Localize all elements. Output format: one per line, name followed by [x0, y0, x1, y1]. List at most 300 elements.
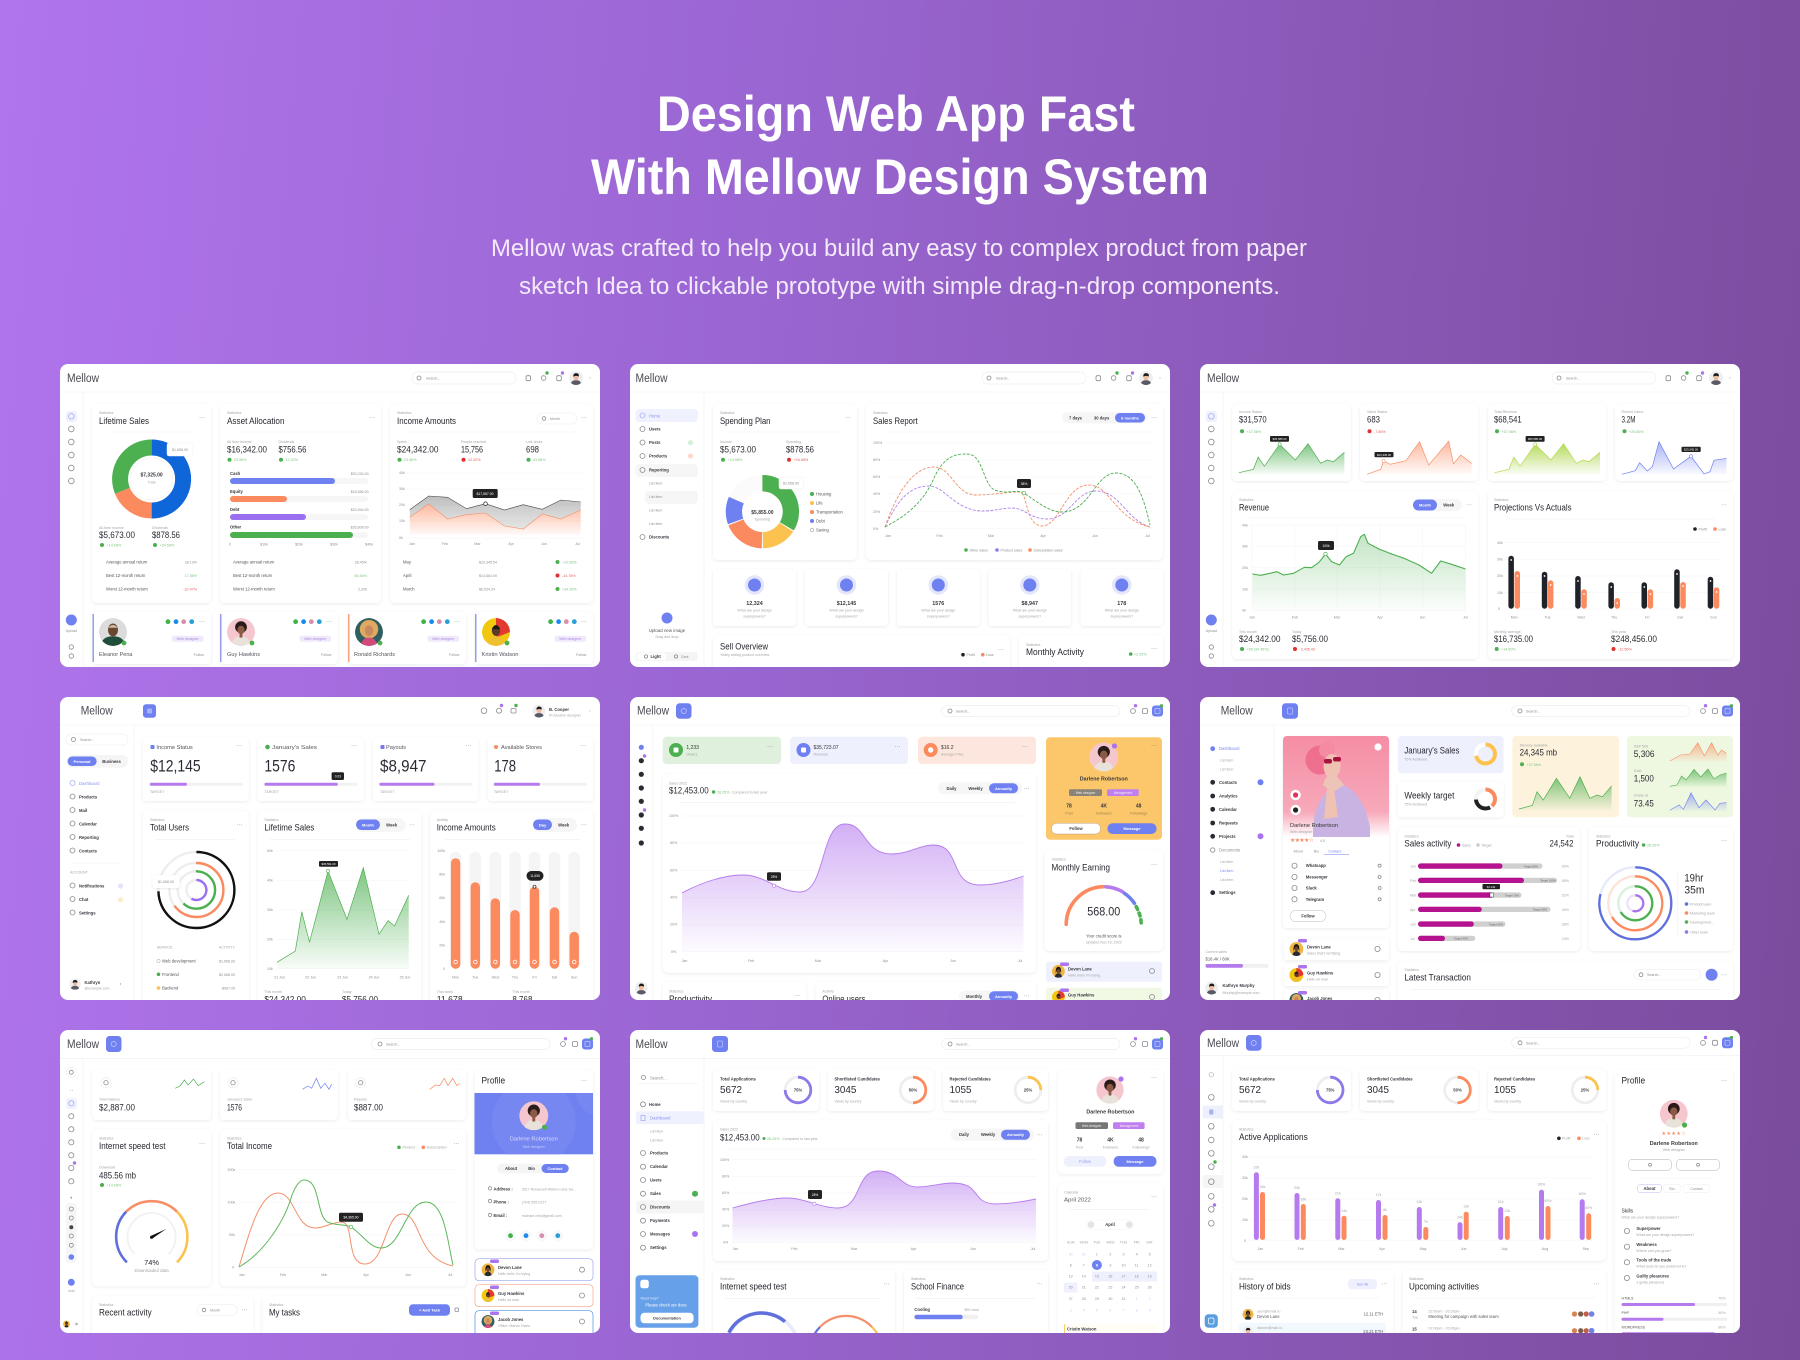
- card: lifetime sales area chart: Week: [386, 822, 398, 828]
- card: spending plan: Housing: [816, 492, 832, 496]
- card: active applications bar chart: Loss: [1582, 1137, 1590, 1141]
- profile cards row: Web designer: [177, 637, 200, 641]
- panel: dashboard 1 lifetime sales: [60, 364, 600, 667]
- card: revenue chart: Week: [1443, 502, 1455, 508]
- sparkline card: income status: Income Status: [1239, 410, 1262, 414]
- card: total users: Statistics: [150, 818, 165, 822]
- sidebar current sales progress: [1205, 950, 1269, 995]
- card: sales area chart: Mar: [815, 959, 822, 963]
- panel: dashboard 5 sales area: [630, 697, 1170, 1012]
- panel: dashboard 4 income status: [60, 697, 600, 1011]
- bar chart: [229, 471, 373, 546]
- card: sales area chart: Annually: [1007, 1132, 1025, 1137]
- card: upcoming activities: 15: [1412, 1326, 1417, 1332]
- card: calendar: April 2022: [1064, 1197, 1091, 1203]
- card: history of bids: user@email.ru: [1257, 1310, 1280, 1314]
- card: calendar: ···: [1151, 1194, 1157, 1200]
- card: market sparklines: [1627, 736, 1733, 817]
- calendar grid: 13: [1069, 1275, 1073, 1279]
- card: sales area chart: Jul: [1031, 1247, 1035, 1251]
- card: sales area chart: Jan: [682, 959, 687, 963]
- kpi card: shortlisted candidates: 50%: [1453, 1088, 1462, 1092]
- contact card: devon lane: [1046, 962, 1162, 982]
- sidebar navigation: Home: [649, 1102, 661, 1107]
- card: income amounts bar chart: [430, 811, 593, 1011]
- sparkline card: sales status: [1360, 404, 1478, 481]
- card: projections vs actuals bar chart: Statistics: [1494, 498, 1509, 502]
- card: sales report line chart: 38%: [1021, 482, 1027, 486]
- card: revenue chart: Jan: [1249, 616, 1255, 620]
- card: profile: Post: [1076, 1146, 1083, 1150]
- card: sales area chart: Daily: [946, 786, 957, 791]
- card: profile: michael.mitc@gmail.com: [522, 1214, 562, 1218]
- header: Search...: [426, 376, 440, 380]
- card: lifetime sales area chart: Statistics: [264, 818, 279, 822]
- card: active applications bar chart: 24k: [1457, 1216, 1463, 1220]
- card: projections vs actuals bar chart: Monthly average: [1494, 630, 1521, 634]
- sparkline card: total revenue: [1488, 404, 1606, 481]
- header: Search...: [956, 1042, 970, 1046]
- card: projections vs actuals bar chart: 20k: [1497, 574, 1503, 578]
- card: monthly earning gauge: [1044, 850, 1163, 951]
- stat card: orders: Orders: [686, 752, 698, 756]
- card: profile photo: Bio: [1314, 850, 1319, 854]
- calendar grid: 9: [1109, 1263, 1111, 1267]
- card: profile and skills: HTML5: [1622, 1296, 1633, 1300]
- profile banner: Web designer: [523, 1145, 546, 1149]
- sparkline card: total balance: $2,887.00: [99, 1103, 135, 1113]
- card: productivity: 19hr: [1684, 872, 1704, 884]
- card: history of bids: ···: [1381, 1282, 1387, 1288]
- calendar grid: 20: [1069, 1286, 1073, 1290]
- kpi card: shortlisted candidates: [828, 1069, 934, 1111]
- card: active applications bar chart: 13k: [1504, 1209, 1510, 1213]
- panel: dashboard 7 internet speed: [60, 1030, 624, 1346]
- card: sales report line chart: Jan: [885, 534, 891, 538]
- stat cards row: Income Status: [156, 745, 193, 751]
- sidebar navigation: Reporting: [79, 835, 99, 840]
- card: sales area chart: 60%: [670, 868, 678, 872]
- sparkline card: recent users: +25.56%: [1629, 430, 1644, 434]
- card: profile: Follow: [1079, 1159, 1092, 1164]
- card: spending plan: ···: [845, 415, 851, 421]
- card: profile and skills: PHP: [1622, 1311, 1629, 1315]
- card: income amounts: March: [403, 586, 415, 592]
- card: lifetime sales area chart: This month: [264, 990, 282, 994]
- kpi card: rejected candidates: Rejected Candidates: [1494, 1076, 1536, 1082]
- card: income amounts bar chart: Mon: [452, 976, 459, 980]
- header: Mellow: [1207, 1038, 1240, 1050]
- kpi card: total applications: Total Applications: [720, 1076, 756, 1082]
- sidebar navigation: Documents: [1219, 848, 1240, 852]
- card: sales activity: Sales activity: [1404, 839, 1452, 849]
- card: monthly earning gauge: 568.00: [1087, 906, 1120, 918]
- card: sales area chart: 28.25%: [767, 1137, 780, 1141]
- card: total income line chart: Jun: [405, 1273, 411, 1277]
- card: productivity: Statistics: [1596, 834, 1611, 838]
- header: Mellow: [67, 373, 100, 385]
- card: upcoming activities: Tue: [1412, 1316, 1418, 1320]
- card: income amounts: $6,534.24: [479, 588, 495, 592]
- area chart: [399, 471, 585, 546]
- card: projections vs actuals bar chart: [1488, 491, 1733, 659]
- contact card: devon lane: [1284, 938, 1389, 960]
- panel: dashboard 3 revenue: [1200, 364, 1740, 667]
- card: profile yellow: 78: [1066, 804, 1072, 810]
- user profile chip: @example.com: [84, 986, 110, 990]
- kpi card: total applications: 75%: [1326, 1088, 1335, 1092]
- horizontal bar chart: [1410, 863, 1570, 941]
- calendar grid: 15: [1095, 1275, 1099, 1279]
- card: internet speed gauges: Internet speed test: [720, 1282, 787, 1292]
- card: asset allocation: Best 12-month return: [233, 573, 273, 578]
- sparkline card: income status: $31,570: [1239, 415, 1267, 425]
- card: profile and skills: 70%: [1718, 1296, 1726, 1300]
- sidebar navigation: List item: [1220, 878, 1233, 882]
- card: active applications bar chart: 60%: [1579, 1192, 1587, 1196]
- card: upcoming activities: Upcoming activities: [1409, 1282, 1479, 1292]
- sidebar navigation: List item: [1220, 869, 1233, 873]
- contact card: devon lane: [475, 1259, 593, 1281]
- sidebar icons: [1202, 1072, 1223, 1328]
- card: profile: 78: [1077, 1138, 1082, 1144]
- calendar grid: 29: [1095, 1297, 1099, 1301]
- calendar grid: 1: [1096, 1252, 1098, 1256]
- card: productivity: Product team: [1690, 902, 1711, 906]
- card: active applications bar chart: Statistics: [1239, 1128, 1254, 1132]
- card: monthly activity: [1018, 642, 1164, 667]
- contact card: jacob jones: Jacob Jones: [1307, 996, 1333, 1001]
- card: productivity: ···: [794, 993, 800, 999]
- card: active applications bar chart: July: [1501, 1247, 1508, 1251]
- card: history of bids: Devon Lane: [1257, 1314, 1280, 1319]
- card: projections vs actuals bar chart: $16,735.00: [1494, 634, 1533, 644]
- card: sales area chart: Apr: [883, 959, 889, 963]
- sidebar navigation: Settings: [650, 1245, 667, 1250]
- bar chart: Other: [230, 524, 242, 530]
- card: lifetime sales area chart: 20k: [267, 938, 273, 942]
- area chart: Mar: [474, 542, 481, 546]
- sidebar current sales progress: Murphy@example.com: [1222, 991, 1260, 995]
- card: income amounts bar chart: 100k: [437, 849, 445, 853]
- card: sales area chart: Annually: [995, 786, 1013, 791]
- card: profile: Profile: [482, 1076, 505, 1086]
- portrait illustration: [1306, 742, 1370, 837]
- sidebar navigation: Products: [79, 794, 98, 800]
- sidebar navigation: Settings: [1219, 890, 1236, 895]
- card: sell overview: Loss: [986, 653, 994, 657]
- card: revenue chart: 20k: [1242, 566, 1248, 570]
- calendar grid: 28: [1082, 1297, 1086, 1301]
- card: history of bids: See All: [1357, 1283, 1368, 1287]
- card: total users: $967.00: [222, 986, 235, 990]
- sparkline card: payouts: [348, 1070, 466, 1120]
- card: revenue chart: $24,342.00: [1239, 634, 1280, 644]
- card: latest transaction: [1398, 962, 1733, 1012]
- card: lifetime sales area chart: 30k: [267, 908, 273, 912]
- card: sales area chart: $12,453.00: [669, 786, 709, 796]
- sparkline card: sales status: Sales Status: [1367, 410, 1387, 414]
- card: weekly target: Weekly target: [1404, 791, 1455, 801]
- help card: Need help?: [640, 1296, 659, 1300]
- sparkline card: payouts: Payouts: [354, 1098, 367, 1102]
- card: asset allocation: All-time income: [227, 440, 252, 444]
- stat cards row: superpowers?: [835, 614, 858, 618]
- card: revenue chart: 100k: [1322, 544, 1330, 548]
- card: market sparklines: Grade at: [1634, 794, 1648, 798]
- card: lifetime sales: All-time income: [99, 526, 124, 530]
- card: lifetime sales area chart: 21 Jun: [274, 976, 285, 980]
- card: projections vs actuals bar chart: Sat: [1677, 616, 1683, 620]
- card: sales area chart: Apr: [911, 1247, 917, 1251]
- card: revenue chart: [1232, 491, 1478, 659]
- card: sales area chart: ···: [1024, 786, 1030, 792]
- card: lifetime sales area chart: [264, 818, 422, 1000]
- card: lifetime sales area chart: Month: [362, 822, 375, 828]
- card: sales area chart: Feb: [791, 1247, 798, 1251]
- stat card: average price: $16.2: [941, 745, 954, 751]
- card: asset allocation: ···: [369, 415, 375, 421]
- card: revenue chart: 10k: [1242, 587, 1248, 591]
- contact card: jacob jones: Office: Marvin Estes: [498, 1324, 530, 1328]
- sparkline card: sales status: -7.56%: [1374, 430, 1386, 434]
- stat cards row: superpowers?: [927, 614, 950, 618]
- card: projections vs actuals bar chart: Projections Vs Actuals: [1494, 503, 1572, 513]
- card: profile: 48: [1138, 1138, 1144, 1144]
- stat cards row: TARGET: [264, 790, 280, 794]
- card: profile and skills: Where can you grow?: [1636, 1249, 1671, 1253]
- card: spending plan: +34.56%: [794, 458, 809, 462]
- calendar grid: 11: [1135, 1263, 1138, 1267]
- sidebar navigation: Products: [649, 454, 668, 458]
- sidebar navigation: List item: [1220, 758, 1233, 762]
- user profile chip: [69, 978, 121, 990]
- calendar grid: MON: [1080, 1240, 1088, 1244]
- card: market sparklines: 5,306: [1634, 749, 1654, 759]
- title: [591, 86, 1209, 205]
- card: income amounts bar chart: Sat: [552, 976, 557, 980]
- calendar grid: 6: [1070, 1263, 1072, 1267]
- card: sales area chart: [713, 1120, 1048, 1261]
- card: sales report line chart: Sales Report: [873, 416, 918, 426]
- sidebar navigation: Calendar: [79, 822, 97, 826]
- card: profile: ···: [1151, 1075, 1157, 1081]
- calendar grid: 24: [1122, 1286, 1126, 1290]
- card: income amounts: $23,345.54: [479, 560, 497, 564]
- card: lifetime sales: Best 12-month return: [106, 573, 146, 578]
- area chart: 0k: [399, 536, 403, 540]
- card: total income line chart: 200k: [228, 1168, 235, 1172]
- horizontal bar chart: 24%: [1562, 937, 1570, 941]
- contact card: jacob jones: [475, 1311, 593, 1341]
- contact card: jacob jones: Jacob Jones: [498, 1317, 524, 1322]
- card: recent activity: ···: [241, 1308, 247, 1314]
- header: [1200, 703, 1740, 1000]
- sparkline card: january sales: 1576: [227, 1103, 242, 1113]
- card: active applications bar chart: Apr: [1379, 1247, 1386, 1251]
- card: profile: [474, 1068, 624, 1249]
- card: productivity: [663, 982, 806, 1012]
- card: income amounts: $24,342.00: [397, 445, 438, 455]
- kpi card: total applications: Views by country: [1239, 1100, 1266, 1104]
- bar chart: $30k: [330, 542, 338, 546]
- header: Search...: [1526, 710, 1540, 714]
- card: lifetime sales: -32.47%: [183, 588, 198, 592]
- calendar grid: 8: [1096, 1262, 1099, 1267]
- card: sales report line chart: Jul: [1145, 534, 1150, 538]
- card: active applications bar chart: Active Applications: [1239, 1132, 1308, 1142]
- card: lifetime sales area chart: 50k: [267, 849, 273, 853]
- sidebar: Upload: [66, 629, 77, 633]
- card: latest transaction: Latest Transaction: [1404, 973, 1471, 983]
- bar chart: $18,556.00: [351, 490, 369, 494]
- card: total income line chart: Jul: [448, 1273, 452, 1277]
- sparkline card: payouts: $887.00: [354, 1103, 383, 1113]
- card: active applications bar chart: Jun: [1461, 1247, 1466, 1251]
- user profile chip: Kathryn: [84, 980, 101, 985]
- header: [1200, 1035, 1740, 1333]
- stat card: revenue: [790, 737, 908, 764]
- card: upcoming activities: Meeting for campaign with sales team: [1428, 1314, 1499, 1319]
- card: active applications bar chart: 34k: [1260, 1185, 1266, 1189]
- profile cards row: Follow: [576, 653, 587, 657]
- card: profile photo: Darlene Robertson: [1290, 823, 1338, 829]
- stat cards row: $8,947: [380, 756, 426, 775]
- card: profile photo: Whatsapp: [1306, 863, 1326, 868]
- kpi card: total applications: Total Applications: [1239, 1076, 1275, 1082]
- help card: Documentation: [653, 1316, 681, 1320]
- card: calendar: April: [1105, 1222, 1115, 1227]
- contact card: jacob jones: [1284, 990, 1389, 1012]
- card: sales report line chart: Product sales: [1000, 548, 1022, 552]
- card: active applications bar chart: 14k: [1341, 1209, 1347, 1213]
- bar chart: $30,234.00: [351, 472, 369, 476]
- horizontal bar chart: Jan: [1410, 864, 1416, 868]
- card: income amounts bar chart: 20k: [439, 944, 445, 948]
- card: spending plan: Saving: [816, 528, 829, 532]
- sidebar navigation: Posts: [649, 440, 661, 445]
- sparkline card: income status: [1232, 404, 1351, 481]
- sparkline card: income status: +37.56%: [1246, 430, 1262, 434]
- stat cards row: What are your design: [737, 608, 772, 612]
- card: sales area chart: Daily: [959, 1132, 970, 1137]
- card: profile: (704) 555-0127: [522, 1200, 546, 1204]
- bar chart: Debt: [230, 507, 240, 512]
- card: profile yellow: Management: [1114, 791, 1132, 795]
- calendar grid: [1064, 1240, 1157, 1312]
- horizontal bar chart: 52%: [1562, 894, 1570, 898]
- card: spending plan: $878.56: [786, 445, 814, 455]
- card: projections vs actuals bar chart: +14.50%: [1501, 648, 1516, 652]
- card: sell overview: Sell Overview: [720, 642, 768, 652]
- card: lifetime sales: Dividends: [152, 526, 168, 530]
- sparkline card: total revenue: Total Revenue: [1494, 410, 1517, 414]
- card: profile yellow: ···: [1151, 743, 1157, 749]
- card: total users: Total Users: [150, 822, 189, 832]
- card: profile: Management: [1120, 1124, 1138, 1128]
- sidebar current sales progress: Kathryn Murphy: [1222, 983, 1255, 988]
- card: active applications bar chart: 32k: [1254, 1166, 1259, 1170]
- card: upcoming activities: ···: [1594, 1282, 1600, 1288]
- radial chart: [1599, 867, 1671, 939]
- card: productivity: 28.25%: [1647, 843, 1660, 847]
- area chart: Feb: [442, 542, 448, 546]
- card: projections vs actuals bar chart: 10k: [1497, 591, 1503, 595]
- horizontal bar chart: Target 70%: [1505, 893, 1520, 897]
- card: income amounts bar chart: Fri: [532, 976, 537, 980]
- card: active applications bar chart: Sep: [1583, 1247, 1589, 1251]
- header: Mellow: [1207, 373, 1240, 385]
- stat cards row: ···: [580, 743, 586, 749]
- calendar grid: 8: [1136, 1308, 1138, 1312]
- card: income amounts: 15,756: [461, 445, 483, 455]
- stat cards row: ···: [236, 743, 242, 749]
- card: asset allocation: 28.45%: [355, 560, 368, 564]
- theme toggle: [636, 652, 698, 661]
- profile cards row: Ronald Richards: [354, 652, 395, 658]
- card: my tasks: My tasks: [269, 1308, 300, 1318]
- card: lifetime sales: ···: [199, 415, 205, 421]
- card: lifetime sales area chart: Today: [342, 990, 352, 994]
- kpi card: shortlisted candidates: Views by country: [1367, 1100, 1394, 1104]
- card: projections vs actuals bar chart: ···: [1721, 502, 1727, 508]
- card: income amounts: People reached: [461, 440, 486, 444]
- card: total income line chart: [220, 1129, 466, 1286]
- header: Search...: [996, 376, 1010, 380]
- horizontal bar chart: Apr: [1410, 908, 1416, 912]
- profile cards row: Web designer: [304, 637, 327, 641]
- card: profile photo: Follow: [1301, 914, 1315, 918]
- card: sales report line chart: Mar: [988, 534, 995, 538]
- card: sales activity: Sales: [1462, 843, 1471, 847]
- contact card: guy hawkins: Hello oh man: [498, 1298, 519, 1302]
- stat cards row: $8,947: [1022, 601, 1038, 607]
- card: profile and skills: What are your design superpowers?: [1636, 1233, 1694, 1237]
- card: income amounts bar chart: Thu: [512, 976, 518, 980]
- contact card: devon lane: Hello hello I'm trying: [498, 1272, 530, 1276]
- kpi card: total applications: 5672: [1239, 1084, 1261, 1096]
- card: january's sales: 75% Achieved: [1404, 758, 1427, 762]
- contact card: devon lane: Devon Lane: [1068, 966, 1092, 972]
- sidebar navigation: Contacts: [79, 848, 98, 854]
- card: profile: Darlene Robertson: [1086, 1109, 1134, 1115]
- horizontal bar chart: Target 85%: [1524, 864, 1539, 868]
- calendar grid: 6: [1109, 1308, 1111, 1312]
- sparkline card: recent users: Recent Users: [1622, 410, 1643, 414]
- horizontal bar chart: 45%: [1562, 908, 1570, 912]
- card: active applications bar chart: 13k: [1416, 1200, 1422, 1204]
- card: lifetime sales area chart: Lifetime Sales: [264, 822, 315, 832]
- stat cards row: TARGET: [150, 790, 165, 794]
- card: recent activity: [92, 1296, 253, 1346]
- horizontal bar chart: Jul: [1410, 937, 1415, 941]
- header: Search...: [386, 1042, 400, 1046]
- card: my tasks: Statistics: [269, 1303, 284, 1307]
- card: revenue chart: -2,435.00: [1300, 648, 1315, 652]
- bar chart: Cash: [230, 471, 241, 476]
- sidebar navigation: Users: [649, 426, 661, 432]
- card: income amounts: Statistics: [397, 411, 412, 415]
- card: income amounts bar chart: Day: [539, 822, 547, 828]
- horizontal bar chart: 69%: [1562, 864, 1570, 868]
- contact card: devon lane: Devon Lane: [1307, 944, 1331, 950]
- card: monthly activity: +2.20%: [1134, 652, 1147, 656]
- card: sales area chart: 0%: [723, 1240, 729, 1244]
- kpi card: total applications: 5672: [720, 1084, 742, 1096]
- stat card: revenue: ···: [895, 744, 901, 750]
- calendar grid: 31: [1082, 1252, 1086, 1256]
- sidebar icons: [635, 745, 648, 994]
